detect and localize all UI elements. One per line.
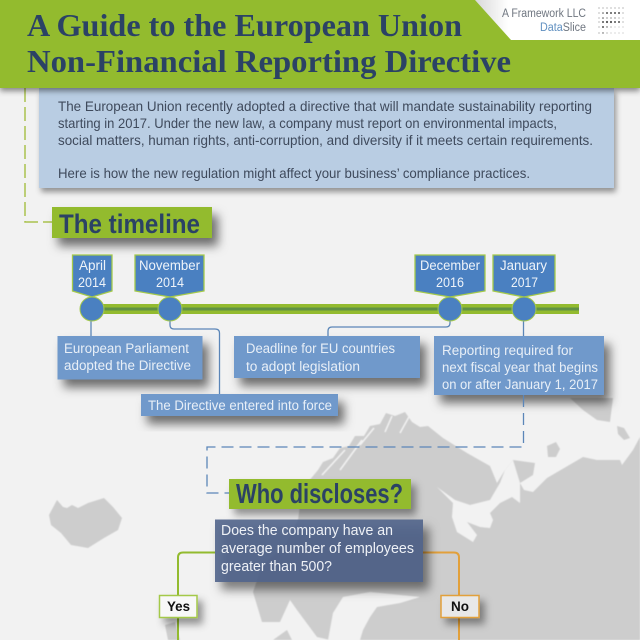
logo corner (475, 0, 640, 40)
callout: reporting required (434, 336, 604, 395)
question box: greater than 500? (221, 559, 332, 575)
milestone: December 2016: 2016 (436, 275, 464, 290)
map: island near Denmark (273, 630, 292, 640)
title: Non-Financial Reporting Directive (27, 43, 511, 79)
callout: European Parliament (58, 336, 202, 380)
connector lines (91, 321, 524, 394)
map: Arctic islands (570, 398, 613, 422)
callout: reporting required: on or after January 1, 2017 (442, 377, 598, 392)
title: A Guide to the European Union (27, 7, 462, 43)
question box: Does the company have an (221, 523, 393, 539)
map: Baltic Sea (328, 592, 420, 640)
title (27, 7, 511, 79)
map of northern Europe (49, 398, 640, 640)
map: small northwestern islands (165, 622, 180, 640)
milestone: April 2014: April (79, 258, 106, 273)
callout: entered into force (141, 394, 338, 416)
product name: DataSlice (540, 22, 586, 34)
timeline (58, 255, 604, 416)
question box: average number of employees (221, 541, 414, 557)
map: lake (547, 442, 560, 457)
panel: introduction (39, 88, 614, 188)
dashed connector: intro to timeline (25, 88, 52, 222)
arrow: no branch (423, 552, 459, 640)
callout: European Parliament: adopted the Directive (64, 358, 191, 373)
callout: reporting required: Reporting required for (442, 343, 573, 358)
milestone: November 2014: November (139, 258, 200, 273)
label: No (441, 596, 479, 618)
intro text: Here is how the new regulation might affect your business’ compliance practices. (58, 165, 530, 181)
milestone: January 2017 (493, 255, 555, 321)
milestone: November 2014 (135, 255, 204, 321)
map: White Sea (437, 460, 520, 542)
callout: reporting required: next fiscal year that begins (442, 360, 598, 375)
map: Scandinavia and Russia (253, 412, 640, 640)
milestone: April 2014 (72, 255, 112, 321)
heading: The timeline: The timeline (59, 209, 200, 239)
callout: entered into force: The Directive entered into force (148, 398, 332, 413)
intro text: starting in 2017. Under the new law, a company must report on environmental impacts, (58, 115, 557, 131)
callout: European Parliament: European Parliament (64, 341, 189, 356)
milestone: January 2017: 2017 (511, 275, 538, 290)
heading: Who discloses?: Who discloses? (236, 478, 403, 509)
question box (215, 520, 423, 582)
milestone: November 2014: 2014 (156, 275, 184, 290)
company name: A Framework LLC (502, 8, 586, 20)
dashed connector: timeline to who discloses (207, 395, 524, 493)
callout: deadline: Deadline for EU countries (246, 341, 395, 356)
callout: deadline (234, 336, 420, 378)
milestone: January 2017: January (500, 258, 547, 273)
label: Yes: Yes (167, 598, 190, 614)
intro text: The European Union recently adopted a directive that will mandate sustainability reporting (58, 98, 592, 114)
intro text (58, 98, 593, 181)
map: coast island (617, 426, 630, 440)
label: Yes (160, 596, 197, 618)
intro text: social matters, human rights, anti-corruption, and diversity if it meets certain requirements. (58, 132, 593, 148)
map: Norwegian fjords (322, 415, 410, 475)
arrow: yes branch (178, 552, 215, 640)
callout: deadline: to adopt legislation (246, 359, 360, 374)
label: No: No (451, 598, 469, 614)
milestone: December 2016: December (420, 258, 480, 273)
timeline bar (92, 304, 579, 314)
milestone: December 2016 (415, 255, 485, 321)
icon: dot grid logo (598, 8, 624, 34)
map: Iceland (49, 498, 122, 548)
header banner (0, 0, 640, 88)
milestone: April 2014: 2014 (78, 275, 106, 290)
